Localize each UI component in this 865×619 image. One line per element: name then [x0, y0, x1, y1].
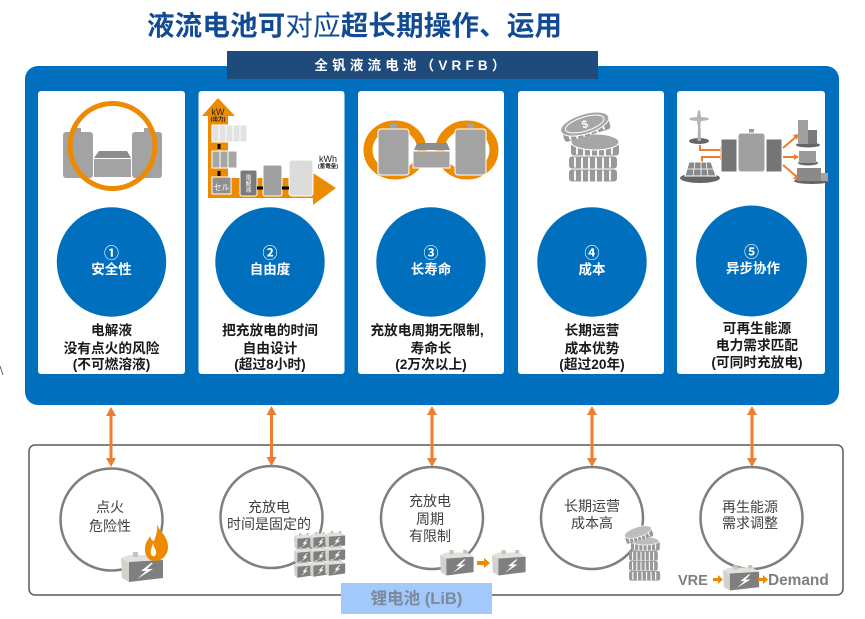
icon: VRE battery Demand: Demand [768, 572, 829, 589]
label: LiB: 锂电池 (LiB) [371, 589, 462, 608]
LiB item: limited cycles: 周期 [416, 511, 444, 527]
panel: VRFB blue background [25, 66, 839, 405]
text: asynchronous description: 电力需求匹配 [716, 337, 798, 353]
text: freedom description: 自由设计 [243, 340, 298, 356]
text: freedom description [222, 322, 318, 372]
icon: VRE battery Demand: VRE [678, 573, 708, 589]
circle: safety: ① [104, 245, 119, 262]
LiB item: limited cycles [381, 467, 526, 576]
circle: asynchronous: 异步协作 [726, 260, 780, 276]
LiB item: ignition risk: 危险性 [89, 518, 131, 534]
text: long life description: 充放电周期无限制, [370, 322, 484, 338]
icon: kW kWh chart: 解 [245, 180, 252, 188]
arrow: cost comparison [587, 406, 597, 467]
circle: long life: ③ [423, 245, 439, 262]
circle: safety: 安全性 [91, 261, 132, 277]
text: safety description: 电解液 [91, 322, 132, 338]
text: cost description: 成本优势 [565, 340, 620, 356]
icon: kW kWh chart: (蓄電量) [318, 162, 338, 170]
icon: kW kWh chart: 電 [245, 175, 252, 182]
panel: card 3 long life [358, 91, 504, 374]
LiB item: high cost: 成本高 [571, 515, 613, 531]
LiB item: fixed charge time: 充放电 [248, 499, 290, 515]
LiB item: fixed charge time [220, 466, 345, 578]
circle: safety [57, 207, 166, 317]
circle: asynchronous: ⑤ [744, 244, 759, 261]
icon: coin stacks: $ [580, 118, 590, 132]
arrow: life comparison [427, 406, 437, 467]
circle: freedom [215, 207, 325, 317]
icon: VRE battery Demand [678, 565, 829, 590]
circle: asynchronous [696, 206, 807, 316]
text: long life description: (2万次以上) [395, 356, 467, 372]
icon: coin stacks [558, 107, 619, 182]
LiB item: high cost [541, 467, 660, 581]
text: long life description [370, 322, 484, 372]
circle: cost: 成本 [578, 261, 606, 277]
icon: burning battery [121, 523, 168, 582]
arrow: async comparison [747, 406, 757, 467]
text: freedom description: (超过8小时) [234, 357, 306, 372]
icon: kW kWh chart: kWh [319, 154, 337, 164]
panel: card 1 safety [38, 91, 185, 374]
LiB item: ignition risk [60, 468, 168, 582]
text: long life description: 寿命长 [410, 340, 452, 356]
text: cost description: (超过20年) [559, 356, 625, 372]
LiB item: fixed charge time: 时间是固定的 [227, 516, 311, 532]
circle: long life: 长寿命 [411, 261, 452, 277]
header bar: VRFB [227, 51, 598, 79]
icon: battery grid [294, 531, 345, 578]
circle: freedom: 自由度 [250, 261, 291, 277]
text: cost description: 长期运营 [565, 322, 619, 338]
text: safety description: 没有点火的风险 [64, 340, 160, 356]
stray mark at left edge [0, 366, 3, 375]
panel: card 5 asynchronous [677, 91, 830, 374]
panel: card 2 freedom [198, 91, 344, 374]
icon: renewable sources to tanks to users [680, 110, 830, 184]
icon: kW kWh chart: 液 [245, 186, 252, 194]
circle: long life [376, 207, 486, 317]
text: freedom description: 把充放电的时间 [222, 322, 318, 338]
icon: kW kWh chart: kW [212, 107, 225, 117]
text: asynchronous description: 可再生能源 [723, 320, 792, 336]
panel: card 4 cost [518, 91, 664, 374]
text: cost description [559, 322, 625, 372]
LiB item: limited cycles: 有限制 [409, 528, 451, 544]
circle: cost: ④ [584, 245, 600, 262]
text: safety description [64, 322, 160, 372]
icon: kW kWh chart: セル [214, 183, 230, 192]
LiB item: renewable matching [678, 467, 829, 590]
title: 液流电池可对应超长期操作、运用 [147, 10, 562, 41]
arrow: freedom comparison [266, 406, 276, 466]
text: asynchronous description [711, 320, 803, 370]
icon: coin stack [623, 523, 660, 581]
text: asynchronous description: (可同时充放电) [711, 354, 803, 370]
header bar: VRFB: 全钒液流电池（VRFB） [314, 57, 510, 73]
icon: kW kWh chart: (出力) [211, 115, 225, 123]
LiB item: renewable matching: 需求调整 [722, 515, 778, 531]
icon: kW kWh chart [202, 98, 338, 205]
panel: LiB outlined box [29, 445, 843, 595]
LiB item: high cost: 长期运营 [564, 498, 620, 514]
icon: tanks with ring [63, 104, 162, 188]
circle: freedom: ② [262, 245, 278, 262]
circle: cost [537, 207, 647, 317]
icon: tanks with two rings [368, 124, 494, 175]
LiB item: renewable matching: 再生能源 [722, 499, 778, 515]
label: LiB [341, 583, 492, 614]
icon: battery to battery [440, 550, 526, 576]
arrow: safety comparison [106, 407, 116, 467]
LiB item: limited cycles: 充放电 [409, 493, 451, 509]
LiB item: ignition risk: 点火 [96, 499, 124, 515]
text: safety description: (不可燃溶液) [73, 356, 150, 372]
